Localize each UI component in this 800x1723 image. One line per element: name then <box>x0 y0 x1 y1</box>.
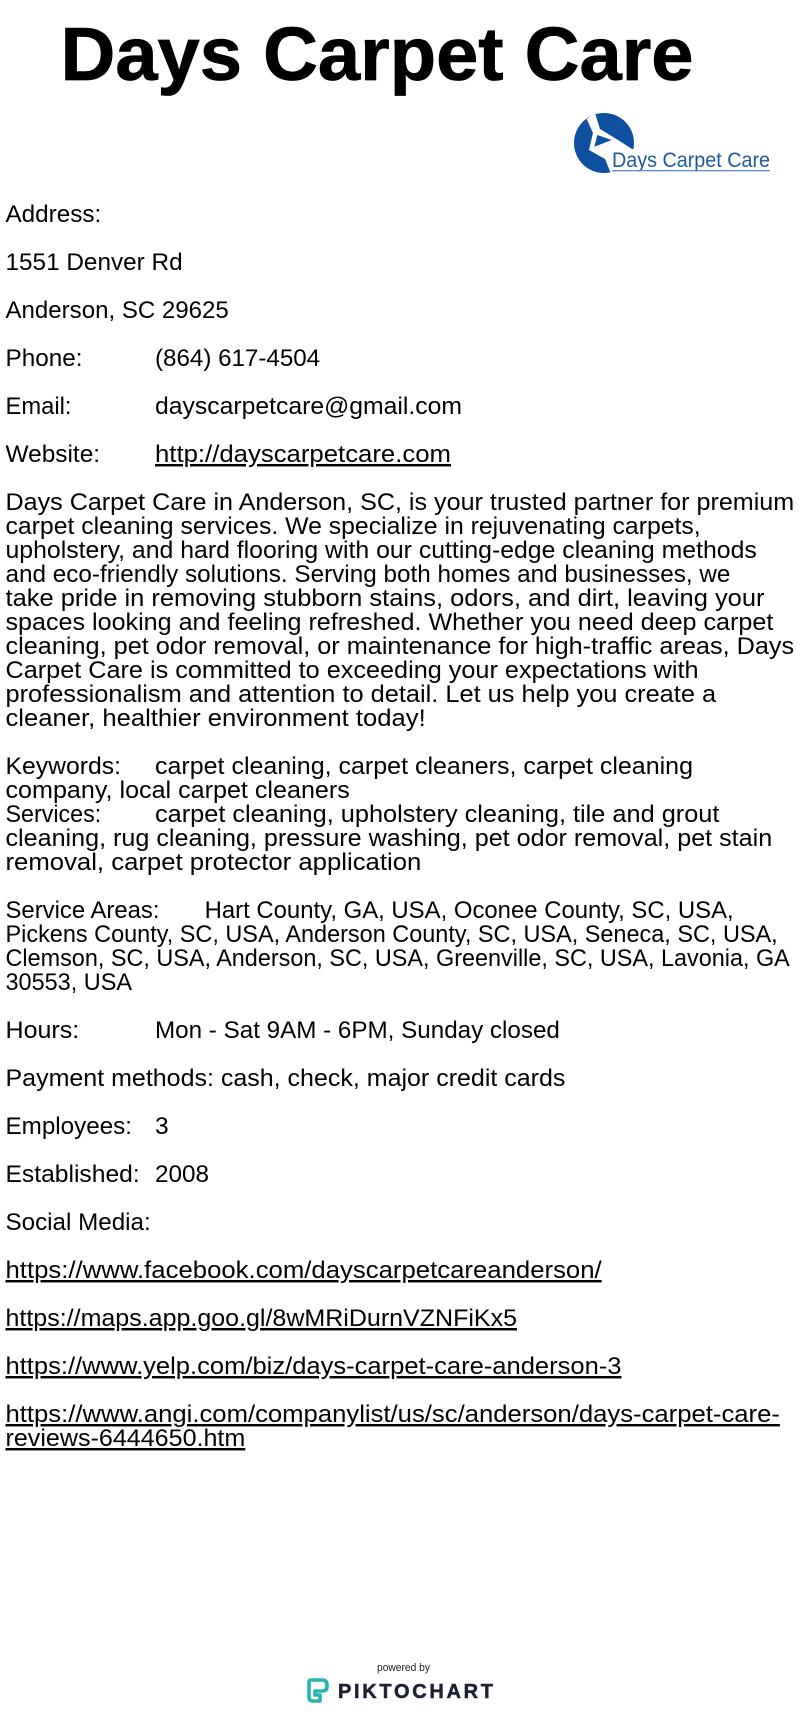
business facts: 3 <box>155 1113 169 1140</box>
business facts: Payment methods: cash, check, major credit cards <box>6 1065 565 1092</box>
contact details <box>6 345 462 468</box>
social media links: https://maps.app.goo.gl/8wMRiDurnVZNFiKx5 <box>6 1305 517 1332</box>
contact details: http://dayscarpetcare.com <box>155 441 451 468</box>
business facts <box>6 1017 565 1188</box>
logo: Days Carpet Care <box>574 113 770 176</box>
service areas: Service Areas: <box>6 897 160 924</box>
contact details: Website: <box>6 441 100 468</box>
social media links: reviews-6444650.htm <box>6 1425 245 1452</box>
address block: 1551 Denver Rd <box>6 249 183 276</box>
Piktochart wordmark: PIKTOCHART <box>338 1681 493 1703</box>
keywords and services: carpet cleaning, carpet cleaners, carpet cleaning <box>155 753 693 780</box>
logo wordmark: Days Carpet Care <box>612 149 770 172</box>
keywords and services: company, local carpet cleaners <box>6 777 350 804</box>
business facts: Hours: <box>6 1017 79 1044</box>
business facts: Employees: <box>6 1113 132 1140</box>
description paragraph: cleaning, pet odor removal, or maintenance for high-traffic areas, Days <box>6 633 794 660</box>
address block <box>6 201 229 324</box>
social media links: https://www.angi.com/companylist/us/sc/anderson/days-carpet-care- <box>6 1401 780 1428</box>
description paragraph: and eco-friendly solutions. Serving both homes and businesses, we <box>6 561 730 588</box>
social media links: https://www.yelp.com/biz/days-carpet-care-anderson-3 <box>6 1353 622 1380</box>
contact details: dayscarpetcare@gmail.com <box>155 393 462 420</box>
contact details: Phone: <box>6 345 82 372</box>
service areas: Pickens County, SC, USA, Anderson County, SC, USA, Seneca, SC, USA, <box>6 921 778 948</box>
keywords and services: carpet cleaning, upholstery cleaning, tile and grout <box>155 801 720 828</box>
business facts: Mon - Sat 9AM - 6PM, Sunday closed <box>155 1017 560 1044</box>
keywords and services: Keywords: <box>6 753 121 780</box>
keywords and services <box>6 753 772 876</box>
powered by label: powered by <box>377 1662 430 1674</box>
description paragraph: cleaner, healthier environment today! <box>6 705 426 732</box>
service areas: 30553, USA <box>6 969 133 996</box>
social media links: https://www.facebook.com/dayscarpetcareanderson/ <box>6 1257 602 1284</box>
social media links: Social Media: <box>6 1209 151 1236</box>
footer: powered by Piktochart <box>309 1662 493 1703</box>
description paragraph: professionalism and attention to detail. Let us help you create a <box>6 681 716 708</box>
service areas: Hart County, GA, USA, Oconee County, SC, USA, <box>205 897 734 924</box>
business facts: Established: <box>6 1161 140 1188</box>
contact details: Email: <box>6 393 72 420</box>
contact details: (864) 617-4504 <box>155 345 320 372</box>
description paragraph: Days Carpet Care in Anderson, SC, is your trusted partner for premium <box>6 489 794 516</box>
description paragraph: take pride in removing stubborn stains, odors, and dirt, leaving your <box>6 585 764 612</box>
description paragraph <box>6 489 794 732</box>
address block: Anderson, SC 29625 <box>6 297 229 324</box>
keywords and services: removal, carpet protector application <box>6 849 421 876</box>
title: Days Carpet Care <box>60 12 694 96</box>
description paragraph: carpet cleaning services. We specialize in rejuvenating carpets, <box>6 513 701 540</box>
keywords and services: cleaning, rug cleaning, pressure washing, pet odor removal, pet stain <box>6 825 772 852</box>
description paragraph: spaces looking and feeling refreshed. Whether you need deep carpet <box>6 609 773 636</box>
icon: Piktochart logo mark <box>309 1680 327 1701</box>
service areas <box>6 897 790 996</box>
icon: blue circle with squeegee mark <box>574 113 640 176</box>
social media links <box>6 1209 780 1452</box>
address block: Address: <box>6 201 101 228</box>
description paragraph: upholstery, and hard flooring with our cutting-edge cleaning methods <box>6 537 757 564</box>
keywords and services: Services: <box>6 801 101 828</box>
business facts: 2008 <box>155 1161 209 1188</box>
description paragraph: Carpet Care is committed to exceeding your expectations with <box>6 657 698 684</box>
